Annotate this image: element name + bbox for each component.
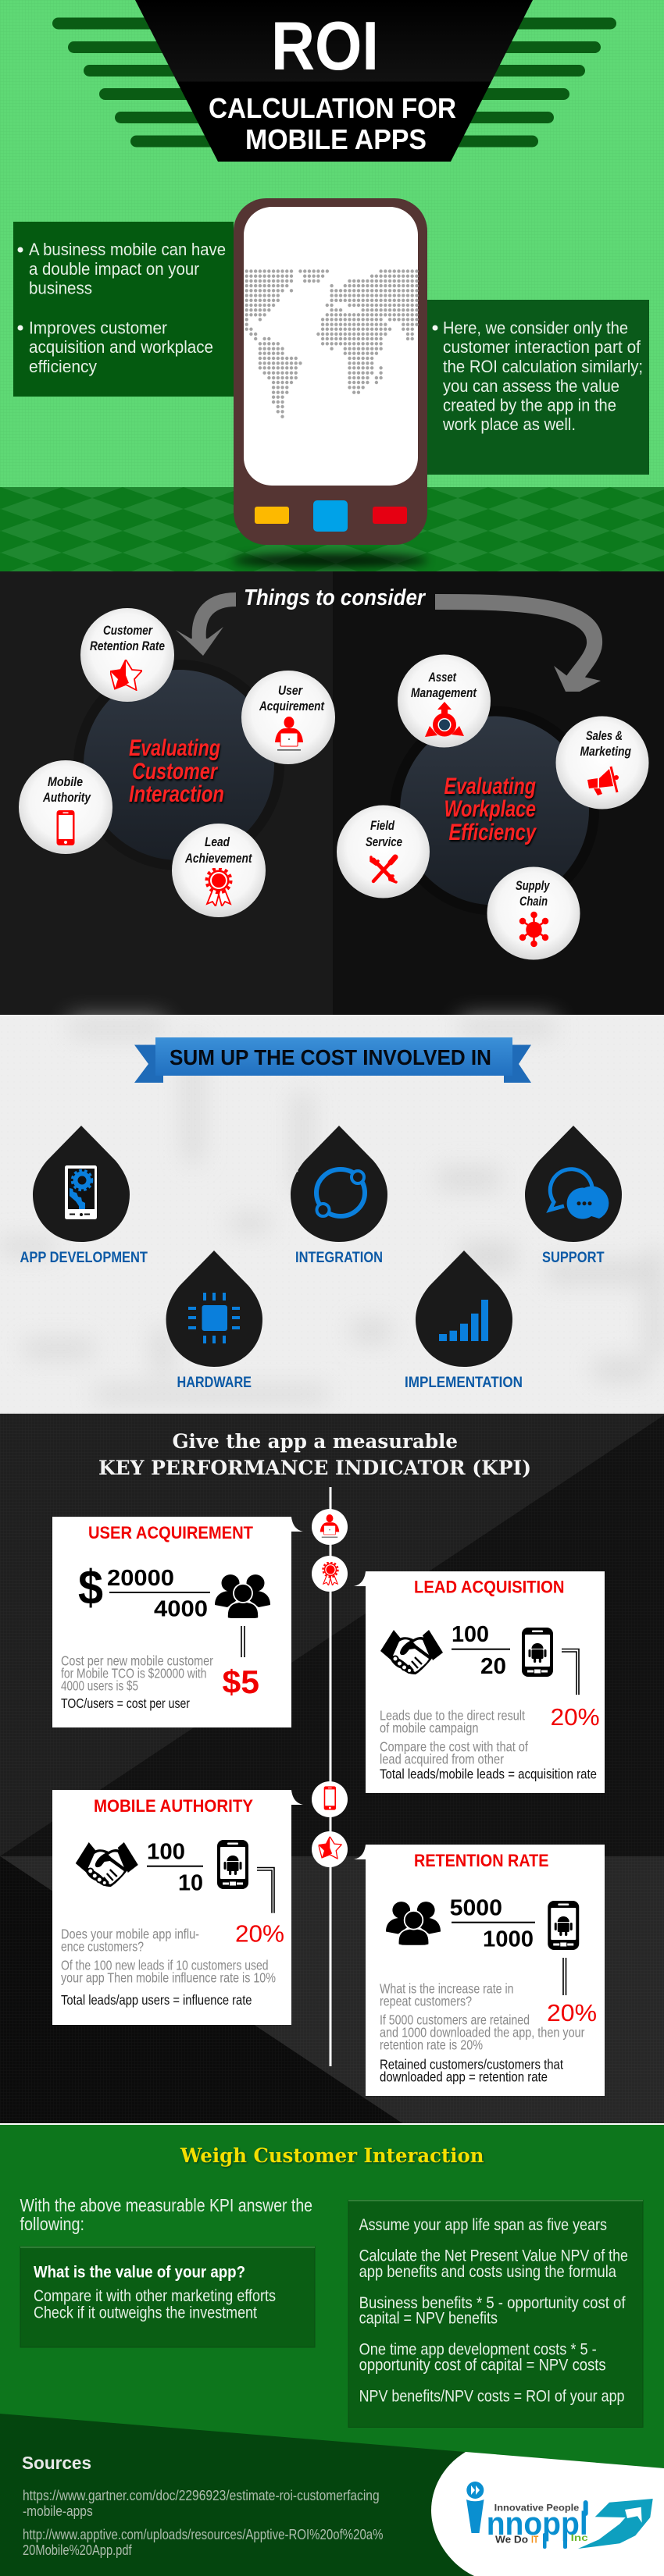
item: support: SUPPORT <box>542 1250 605 1266</box>
floor pattern <box>0 487 664 571</box>
card: user acquirement: 20000 <box>107 1566 174 1591</box>
panel: NPV formula: One time app development costs * 5 - <box>359 2341 597 2359</box>
card: user acquirement: for Mobile TCO is $20000 with <box>61 1666 206 1681</box>
card: retention rate: Retained customers/customers that <box>380 2056 563 2072</box>
section: sum up the cost <box>0 1015 664 1414</box>
arrow: to workplace efficiency <box>435 602 601 692</box>
card: retention rate: retention rate is 20% <box>380 2037 483 2053</box>
item: implementation <box>405 1251 523 1391</box>
logo: Innoppl: Inc <box>571 2532 588 2543</box>
panel: value of your app <box>20 2247 315 2347</box>
card: user acquirement: 4000 users is $5 <box>61 1678 138 1694</box>
section: things to consider <box>0 571 664 1015</box>
panel: right note: work place as well. <box>442 415 576 434</box>
card: retention rate: 5000 <box>450 1895 502 1920</box>
icon: integration ring <box>316 1169 365 1216</box>
card: mobile authority: 10 <box>178 1871 203 1896</box>
node: mobile authority: Authority <box>42 791 91 805</box>
card: mobile authority: Total leads/app users = influence rate <box>61 1992 252 2008</box>
card: lead acquisition: 20% <box>551 1703 600 1731</box>
panel: left bullets: a double impact on your <box>29 259 199 279</box>
panel: evaluating workplace efficiency <box>337 654 648 960</box>
node: lead achievement <box>172 824 266 917</box>
card: retention rate: What is the increase rate in <box>380 1981 514 1997</box>
node: lead achievement: Achievement <box>184 852 253 866</box>
item: hardware: HARDWARE <box>177 1375 252 1391</box>
card: lead acquisition: LEAD ACQUISITION <box>414 1578 564 1597</box>
title banner: CALCULATION FOR <box>209 92 456 124</box>
card: lead acquisition <box>354 1571 605 1793</box>
card: mobile authority: MOBILE AUTHORITY <box>94 1796 253 1816</box>
card: lead acquisition: Compare the cost with that of <box>380 1739 528 1755</box>
node: lead achievement: Lead <box>205 835 230 849</box>
card: lead acquisition: Total leads/mobile leads = acquisition rate <box>380 1766 597 1781</box>
heading ribbon <box>134 1037 531 1083</box>
icon: timeline user <box>312 1509 348 1545</box>
item: app development: APP DEVELOPMENT <box>20 1250 148 1266</box>
node: field service <box>337 806 430 898</box>
card: mobile authority: Does your mobile app influ- <box>61 1927 199 1942</box>
card: mobile authority: ence customers? <box>61 1939 144 1955</box>
panel: NPV formula: NPV benefits/NPV costs = ROI of your app <box>359 2388 625 2406</box>
node: field service: Field <box>370 819 395 833</box>
card: lead acquisition: Leads due to the direct result <box>380 1708 525 1724</box>
node: supply chain <box>487 866 580 960</box>
card: mobile authority: Of the 100 new leads if 10 customers used <box>61 1957 269 1973</box>
node: asset management <box>398 654 491 748</box>
node: mobile authority: Mobile <box>48 775 83 789</box>
node: user acquirement: User <box>278 684 303 698</box>
logo: Innoppl: Innovative People <box>494 2503 580 2514</box>
intro text: With the above measurable KPI answer the <box>20 2195 312 2215</box>
panel: evaluating customer interaction <box>19 608 335 917</box>
panel: evaluating customer interaction: Evaluating <box>129 735 220 761</box>
node: customer retention rate: Customer <box>103 624 153 638</box>
card: retention rate: If 5000 customers are retained <box>380 2012 530 2028</box>
card: mobile authority: 100 <box>147 1839 185 1864</box>
sources: -mobile-apps <box>23 2503 93 2519</box>
card: retention rate: and 1000 downloaded the app, then your <box>380 2025 585 2041</box>
panel: right note: the ROI calculation similarly; <box>443 357 643 376</box>
card: retention rate: RETENTION RATE <box>414 1851 548 1870</box>
timeline <box>312 1487 348 2066</box>
card: retention rate <box>354 1845 605 2096</box>
card: user acquirement: TOC/users = cost per user <box>61 1695 190 1711</box>
card: lead acquisition: of mobile campaign <box>380 1720 478 1736</box>
node: mobile authority <box>19 760 112 854</box>
panel: evaluating customer interaction: Interaction <box>129 781 224 807</box>
panel: NPV formula: Business benefits * 5 - opportunity cost of <box>359 2294 626 2312</box>
card: retention rate: 1000 <box>483 1927 534 1952</box>
panel: right note: customer interaction part of <box>443 337 641 357</box>
node: sales and marketing <box>556 717 648 809</box>
heading: Give the app a measurable <box>173 1430 458 1453</box>
item: support <box>525 1126 622 1266</box>
card: user acquirement: $5 <box>222 1663 259 1700</box>
icon: timeline star <box>312 1831 348 1867</box>
item: app development <box>20 1126 148 1266</box>
card: user acquirement: 4000 <box>154 1597 208 1622</box>
heading ribbon: SUM UP THE COST INVOLVED IN <box>170 1045 491 1069</box>
section: key performance indicator <box>0 1414 664 2123</box>
logo: Innoppl: We Do <box>495 2535 528 2546</box>
logo: Innoppl <box>431 2452 664 2576</box>
sources: http://www.apptive.com/uploads/resources/Apptive-ROI%20of%20a% <box>23 2527 383 2542</box>
heading <box>98 1430 531 1479</box>
card: retention rate: downloaded app = retention rate <box>380 2069 548 2084</box>
panel: left bullets <box>13 222 234 397</box>
icon: timeline ribbon <box>312 1556 348 1592</box>
sources <box>22 2453 383 2558</box>
node: sales and marketing: Sales & <box>586 729 623 743</box>
icon: chip <box>188 1293 240 1343</box>
node: customer retention rate <box>80 608 174 702</box>
panel: left bullets: Improves customer <box>29 318 167 337</box>
card: lead acquisition: 100 <box>452 1622 489 1647</box>
panel: value of your app: Compare it with other marketing efforts <box>34 2287 276 2305</box>
world map dots <box>247 271 417 417</box>
heading: KEY PERFORMANCE INDICATOR (KPI) <box>98 1457 531 1479</box>
panel: NPV formula: opportunity cost of capital = NPV costs <box>359 2357 606 2375</box>
node: customer retention rate: Retention Rate <box>90 639 165 653</box>
node: supply chain: Supply <box>516 879 550 893</box>
node: field service: Service <box>366 835 402 849</box>
panel: left bullets: business <box>29 278 92 298</box>
sources background <box>0 2414 664 2576</box>
item: implementation: IMPLEMENTATION <box>405 1375 523 1391</box>
title banner: ROI <box>271 7 379 84</box>
panel: evaluating workplace efficiency: Efficiency <box>448 820 537 845</box>
node: user acquirement <box>241 671 335 764</box>
icon: phone with world map <box>234 198 427 545</box>
card: lead acquisition: 20 <box>480 1654 506 1679</box>
stripes behind title <box>52 17 616 147</box>
node: asset management: Asset <box>428 671 457 685</box>
panel: NPV formula: app benefits and costs using the formula <box>359 2263 616 2281</box>
card: mobile authority: your app Then mobile influence rate is 10% <box>61 1969 276 1985</box>
panel: NPV formula <box>348 2200 643 2427</box>
icon: phone with gears <box>65 1165 97 1219</box>
intro text: following: <box>20 2214 84 2234</box>
section: intro header <box>0 0 664 571</box>
panel: evaluating workplace efficiency: Workplace <box>444 796 536 822</box>
icon: chat bubbles <box>550 1169 609 1221</box>
card: user acquirement: Cost per new mobile customer <box>61 1653 213 1669</box>
logo: Innoppl: IT <box>531 2535 539 2546</box>
panel: right note: you can assess the value <box>443 376 619 396</box>
panel: left bullets: acquisition and workplace <box>29 337 213 357</box>
intro text <box>20 2195 312 2234</box>
card: retention rate: 20% <box>547 1999 597 2026</box>
panel: value of your app: Check if it outweighs the investment <box>34 2304 257 2322</box>
panel: left bullets: A business mobile can have <box>29 240 226 259</box>
section: weigh customer interaction <box>0 2123 664 2576</box>
panel: right note: created by the app in the <box>443 395 616 415</box>
panel: right note: Here, we consider only the <box>443 318 628 337</box>
phone shadow <box>233 553 428 568</box>
node: asset management: Management <box>411 686 477 700</box>
card: mobile authority <box>52 1790 303 2025</box>
icon: signal bars <box>439 1300 488 1341</box>
node: sales and marketing: Marketing <box>580 745 631 759</box>
sources: Sources <box>22 2453 91 2473</box>
card: retention rate: repeat customers? <box>380 1994 472 2009</box>
icon: timeline phone <box>312 1781 348 1817</box>
logo: Innoppl: nnoppl <box>487 2505 588 2542</box>
card: user acquirement: USER ACQUIREMENT <box>88 1523 254 1542</box>
heading: Things to consider <box>244 585 427 610</box>
node: user acquirement: Acquirement <box>259 699 325 713</box>
panel: evaluating customer interaction: Customer <box>132 759 219 785</box>
panel: evaluating workplace efficiency: Evaluating <box>444 774 536 799</box>
panel: right note <box>427 300 649 475</box>
item: integration <box>291 1126 387 1266</box>
card: mobile authority: 20% <box>235 1920 284 1947</box>
card: user acquirement <box>52 1517 303 1727</box>
panel: NPV formula: capital = NPV benefits <box>359 2310 498 2328</box>
panel: left bullets: efficiency <box>29 357 98 376</box>
sources: https://www.gartner.com/doc/2296923/estimate-roi-customerfacing <box>23 2488 380 2503</box>
item: integration: INTEGRATION <box>295 1250 383 1266</box>
title banner: MOBILE APPS <box>245 123 427 155</box>
arrow: to customer interaction <box>176 600 236 656</box>
phone buttons <box>255 500 407 532</box>
panel: NPV formula: Assume your app life span as five years <box>359 2216 607 2234</box>
panel: value of your app: What is the value of your app? <box>34 2264 245 2282</box>
card: lead acquisition: lead acquired from other <box>380 1752 504 1767</box>
item: hardware <box>166 1251 262 1391</box>
title banner <box>135 0 533 162</box>
card: user acquirement: $ <box>78 1561 103 1615</box>
sources: 20Mobile%20App.pdf <box>23 2542 132 2558</box>
heading: Weigh Customer Interaction <box>180 2144 484 2167</box>
node: supply chain: Chain <box>519 895 548 909</box>
